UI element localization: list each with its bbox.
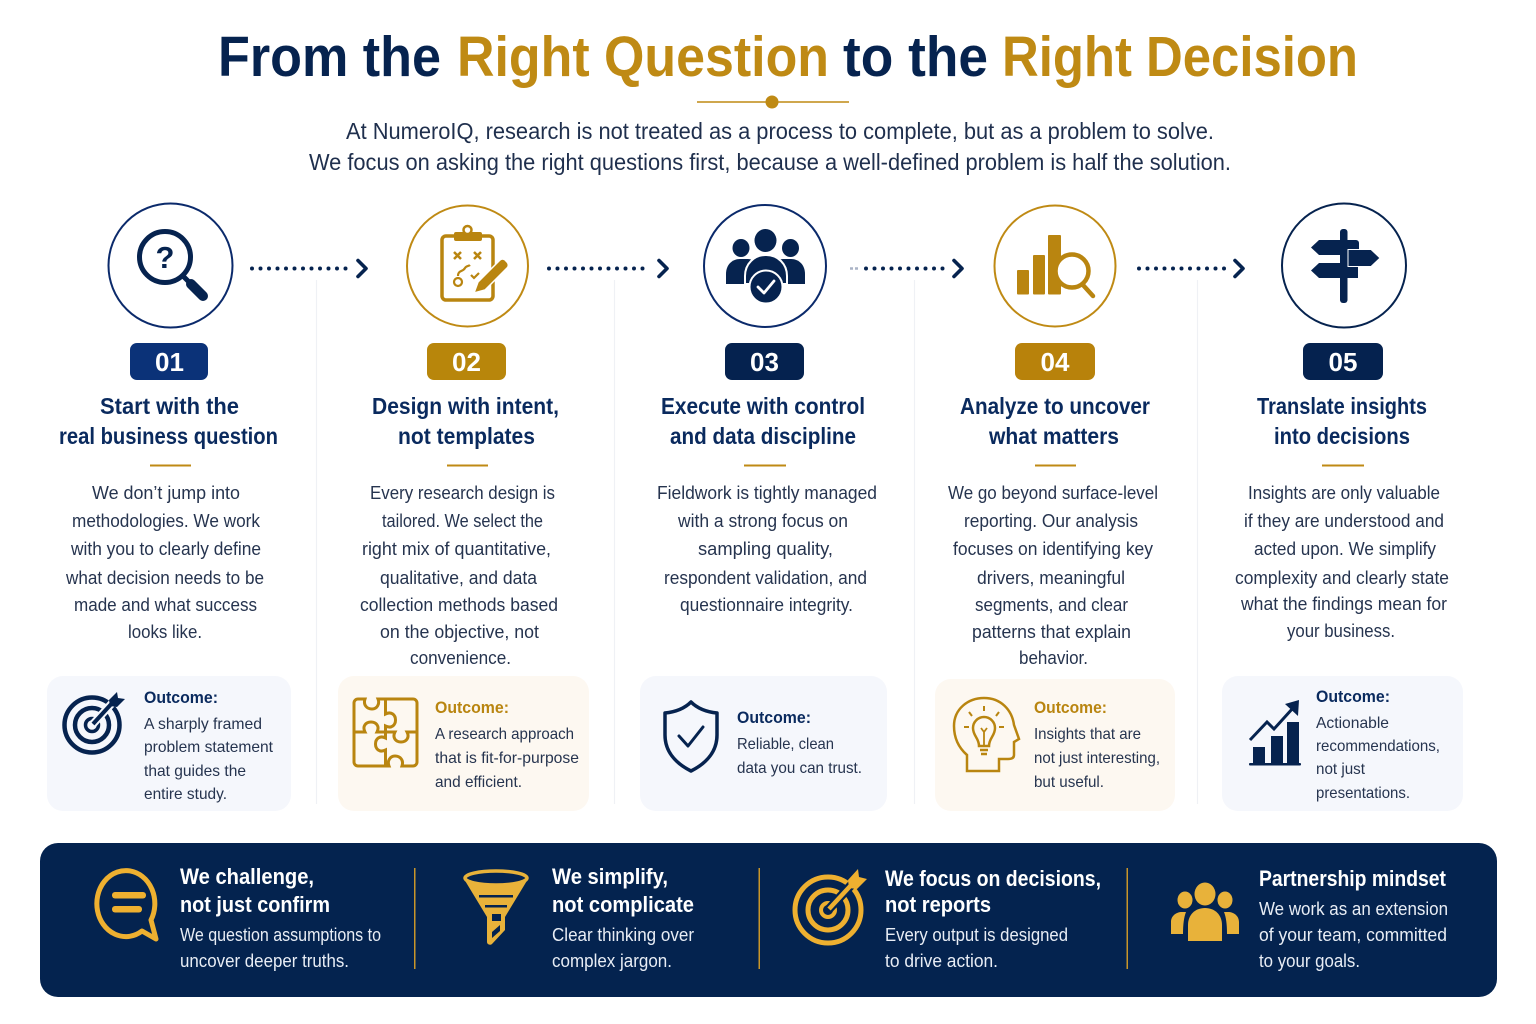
outcome card — [47, 676, 291, 811]
body text: with you to clearly define — [70, 539, 261, 559]
outcome card — [1222, 676, 1463, 811]
icon: target with arrow — [795, 869, 867, 943]
body text: segments, and clear — [975, 595, 1128, 615]
title — [218, 25, 1358, 89]
badge 05 — [1303, 343, 1383, 380]
arrow: step 2 to 3 — [549, 260, 667, 276]
text: We question assumptions to — [180, 925, 381, 945]
heading: into decisions — [1274, 423, 1410, 449]
outcome text: A research approach — [435, 726, 574, 743]
outcome text: that is fit-for-purpose — [435, 750, 579, 767]
outcome text — [1316, 688, 1440, 802]
icon: puzzle — [354, 699, 417, 766]
body text: Insights are only valuable — [1248, 483, 1440, 503]
body text: focuses on identifying key — [953, 539, 1153, 559]
panel: step 5 — [1222, 204, 1463, 811]
body text: if they are understood and — [1244, 511, 1444, 531]
text: complex jargon. — [552, 951, 672, 971]
text — [180, 864, 381, 971]
icon: team with check — [704, 205, 826, 327]
heading: and data discipline — [670, 423, 856, 449]
outcome text: Outcome: — [144, 689, 218, 707]
outcome card — [338, 676, 589, 811]
text: We work as an extension — [1259, 899, 1448, 919]
icon: target with arrow — [64, 692, 125, 752]
heading — [59, 393, 278, 449]
body text — [657, 483, 877, 615]
icon: funnel — [464, 871, 528, 945]
heading: Translate insights — [1257, 393, 1427, 419]
heading — [960, 393, 1150, 449]
arrow: step 4 to 5 — [1139, 260, 1243, 276]
title ornament — [697, 96, 849, 108]
heading — [372, 393, 559, 449]
outcome text: Outcome: — [1316, 688, 1390, 706]
value: we simplify — [464, 864, 694, 971]
body text: patterns that explain — [972, 622, 1131, 642]
title: to the — [843, 25, 988, 89]
outcome text — [1034, 699, 1160, 791]
badge 05: 05 — [1329, 347, 1357, 377]
heading — [1257, 393, 1427, 449]
outcome text: entire study. — [144, 786, 227, 803]
panel: step 2 — [338, 206, 589, 811]
badge 02: 02 — [452, 347, 481, 377]
text: not reports — [885, 892, 991, 917]
body text: sampling quality, — [698, 539, 833, 559]
heading: Analyze to uncover — [960, 393, 1150, 419]
icon: signpost — [1282, 204, 1406, 328]
icon: magnifier with question mark: ? — [156, 240, 174, 275]
body text — [948, 483, 1158, 668]
outcome text — [737, 709, 862, 777]
outcome text: but useful. — [1034, 774, 1104, 791]
subtitle: We focus on asking the right questions first, because a well-defined problem is half the solution. — [309, 149, 1231, 175]
body text: on the objective, not — [380, 622, 539, 642]
icon: clipboard with plan — [407, 206, 528, 326]
badge 04 — [1015, 343, 1095, 380]
body text — [1235, 483, 1449, 641]
icon: speech bubble — [97, 871, 156, 939]
outcome text: Outcome: — [1034, 699, 1107, 717]
body text: acted upon. We simplify — [1254, 539, 1436, 559]
body text: complexity and clearly state — [1235, 568, 1449, 588]
text: Every output is designed — [885, 925, 1068, 945]
body text: drivers, meaningful — [977, 568, 1125, 588]
heading: what matters — [988, 423, 1119, 449]
body text: We go beyond surface-level — [948, 483, 1158, 503]
outcome text: Reliable, clean — [737, 736, 834, 753]
outcome text: data you can trust. — [737, 760, 862, 777]
icon: team — [1171, 882, 1239, 941]
body text: reporting. Our analysis — [964, 511, 1138, 531]
title: Right Decision — [1002, 25, 1358, 89]
body text: behavior. — [1019, 648, 1088, 668]
body text: questionnaire integrity. — [680, 595, 853, 615]
badge 03 — [725, 343, 804, 380]
badge 02 — [427, 343, 506, 380]
icon: head with light bulb — [954, 698, 1019, 771]
badge 03: 03 — [750, 347, 779, 377]
body text: Every research design is — [370, 483, 555, 503]
heading: real business question — [59, 423, 278, 449]
body text: made and what success — [74, 595, 257, 615]
arrow: step 3 to 4 — [850, 260, 962, 276]
heading — [661, 393, 865, 449]
outcome text: Actionable — [1316, 715, 1389, 732]
body text: methodologies. We work — [72, 511, 261, 531]
text: to drive action. — [885, 951, 998, 971]
outcome text: that guides the — [144, 763, 246, 780]
body text: what decision needs to be — [65, 568, 264, 588]
footer band — [40, 843, 1497, 997]
body text: right mix of quantitative, — [362, 539, 551, 559]
body text: qualitative, and data — [380, 568, 538, 588]
icon: growth chart — [1249, 700, 1301, 766]
text: We challenge, — [180, 864, 314, 889]
outcome text: problem statement — [144, 739, 274, 756]
badge 01: 01 — [155, 347, 184, 377]
subtitle — [309, 118, 1231, 175]
text: Clear thinking over — [552, 925, 694, 945]
title: From the — [218, 25, 441, 89]
outcome text: recommendations, — [1316, 738, 1440, 755]
text: uncover deeper truths. — [180, 951, 349, 971]
panel: step 4 — [935, 206, 1175, 811]
panel: step 1 — [47, 204, 291, 811]
body text: convenience. — [410, 648, 511, 668]
text — [1259, 866, 1448, 971]
outcome text: A sharply framed — [144, 716, 262, 733]
body text: what the findings mean for — [1240, 594, 1447, 614]
body text: with a strong focus on — [677, 511, 848, 531]
body text: Fieldwork is tightly managed — [657, 483, 877, 503]
body text: collection methods based — [360, 595, 558, 615]
text: not complicate — [552, 892, 694, 917]
badge 04: 04 — [1041, 347, 1070, 377]
heading: Execute with control — [661, 393, 865, 419]
outcome text — [144, 689, 274, 803]
body text: looks like. — [128, 622, 202, 642]
body text: your business. — [1287, 621, 1395, 641]
panel: step 3 — [640, 205, 887, 811]
outcome text — [435, 699, 579, 791]
text — [885, 866, 1101, 971]
icon: bars with magnifier — [994, 206, 1116, 326]
subtitle: At NumeroIQ, research is not treated as a process to complete, but as a problem to solve. — [346, 118, 1214, 144]
body text: respondent validation, and — [664, 568, 867, 588]
arrow: step 1 to 2 — [252, 260, 366, 276]
outcome text: Insights that are — [1034, 726, 1141, 743]
outcome text: and efficient. — [435, 774, 522, 791]
outcome card — [640, 676, 887, 811]
body text: We don’t jump into — [92, 483, 240, 503]
text: not just confirm — [180, 892, 330, 917]
text: Partnership mindset — [1259, 866, 1447, 891]
body text — [65, 483, 264, 642]
title: Right Question — [457, 25, 829, 89]
text: We simplify, — [552, 864, 668, 889]
value: partnership mindset — [1171, 866, 1448, 971]
badge 01 — [130, 343, 208, 380]
heading: not templates — [398, 423, 535, 449]
outcome text: not just — [1316, 761, 1366, 778]
outcome text: presentations. — [1316, 785, 1410, 802]
text: We focus on decisions, — [885, 866, 1101, 891]
value: focus on decisions — [795, 866, 1101, 971]
text: to your goals. — [1259, 951, 1360, 971]
heading: Design with intent, — [372, 393, 559, 419]
body text: tailored. We select the — [382, 511, 543, 531]
heading: Start with the — [100, 393, 239, 419]
outcome text: Outcome: — [737, 709, 811, 727]
value: we challenge — [97, 864, 381, 971]
outcome text: Outcome: — [435, 699, 509, 717]
outcome text: not just interesting, — [1034, 750, 1160, 767]
text — [552, 864, 694, 971]
outcome card — [935, 679, 1175, 811]
icon: shield with check — [665, 702, 717, 771]
icon: magnifier with question mark — [108, 204, 232, 328]
text: of your team, committed — [1259, 925, 1447, 945]
body text — [360, 483, 558, 668]
